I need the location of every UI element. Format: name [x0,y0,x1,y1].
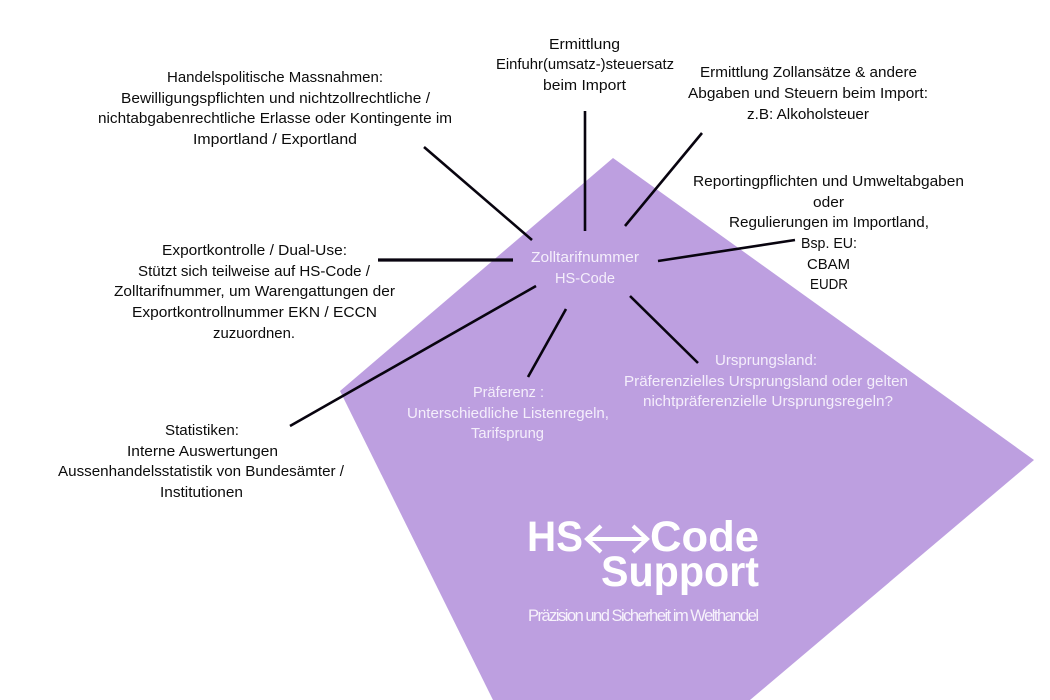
panel: purple background shape [340,158,1034,700]
arrow: line to Ursprungsland [630,296,698,363]
arrow: line to Reportingpflichten [658,240,795,261]
text block: Reportingpflichten und Umweltabgaben: EUDR [810,277,848,293]
text block: Statistiken: Statistiken: [165,423,239,439]
text block: Handelspolitische Massnahmen: Bewilligungspflichten und nichtzollrechtliche / [121,91,431,107]
text block: Reportingpflichten und Umweltabgaben: Reportingpflichten und Umweltabgaben [693,174,964,190]
text block: Präferenz: Tarifsprung [471,426,544,442]
text block: Ursprungsland: Präferenzielles Ursprungsland oder gelten [624,374,908,390]
text block: Statistiken: Aussenhandelsstatistik von Bundesämter / [58,464,345,480]
text block: Präferenz [407,385,609,442]
centre label: Zolltarifnummer HS-Code [531,250,639,287]
text block: Präferenz: Präferenz : [473,385,544,401]
text block: Präferenz: Unterschiedliche Listenregeln, [407,406,609,422]
text block: Handelspolitische Massnahmen [98,70,452,148]
logo: HS Code Support: HS [527,513,583,561]
logo: HS Code Support: Support [601,548,759,596]
text block: Exportkontrolle / Dual-Use: Exportkontrollnummer EKN / ECCN [132,305,377,321]
text block: Handelspolitische Massnahmen: Importland / Exportland [193,132,357,148]
connector lines radiating from centre [290,111,795,426]
text block: Ermittlung Zollansätze: Abgaben und Steuern beim Import: [688,86,928,102]
logo: HS Code Support: Code [650,513,759,561]
text block: Exportkontrolle / Dual-Use: Exportkontrolle / Dual-Use: [162,243,347,259]
text block: Ermittlung Zollansätze: z.B: Alkoholsteuer [747,107,869,123]
text block: Exportkontrolle / Dual-Use: Stützt sich teilweise auf HS-Code / [138,264,371,280]
text block: Exportkontrolle / Dual-Use: zuzuordnen. [213,326,295,342]
text block: Ermittlung Zollansätze [688,65,928,123]
text block: Ermittlung Einfuhrumsatzsteuersatz: Ermittlung [549,37,620,53]
text block: Statistiken: Institutionen [160,485,243,501]
text block: Handelspolitische Massnahmen: nichtabgabenrechtliche Erlasse oder Kontingente im [98,111,452,127]
text block: Ermittlung Einfuhrumsatzsteuersatz: Einfuhr(umsatz-)steuersatz [496,57,674,73]
arrow: line to Präferenz [528,309,566,377]
text block: Reportingpflichten und Umweltabgaben [693,174,964,293]
icon: double-headed arrow [587,526,647,552]
arrow: line to Statistiken [290,286,536,426]
text block: Reportingpflichten und Umweltabgaben: oder [813,195,844,211]
text block: Ermittlung Einfuhrumsatzsteuersatz [496,37,674,94]
arrow: line to Exportkontrolle [378,258,513,262]
text block: Ursprungsland: nichtpräferenzielle Ursprungsregeln? [643,394,893,410]
text block: Ermittlung Zollansätze: Ermittlung Zollansätze & andere [700,65,917,81]
arrow: line to Handelspolitische Massnahmen [424,147,532,240]
text block: Exportkontrolle / Dual-Use [114,243,395,342]
centre label: Zolltarifnummer HS-Code: Zolltarifnummer [531,250,639,266]
logo: HS Code Support [527,513,759,625]
text block: Ursprungsland [624,353,908,410]
text block: Reportingpflichten und Umweltabgaben: Regulierungen im Importland, [729,215,929,231]
text block: Handelspolitische Massnahmen: Handelspolitische Massnahmen: [167,70,383,86]
text block: Ermittlung Einfuhrumsatzsteuersatz: beim Import [543,78,626,94]
text block: Reportingpflichten und Umweltabgaben: Bsp. EU: [801,236,857,252]
text block: Ursprungsland: Ursprungsland: [715,353,817,369]
arrow: line to Einfuhrsteuersatz [584,111,586,231]
logo: HS Code Support: Präzision und Sicherheit im Welthandel [528,607,759,625]
text block: Reportingpflichten und Umweltabgaben: CBAM [807,257,850,273]
centre label: Zolltarifnummer HS-Code: HS-Code [555,271,615,287]
text block: Exportkontrolle / Dual-Use: Zolltarifnummer, um Warengattungen der [114,284,395,300]
arrow: line to Zollansätze [625,133,702,226]
text block: Statistiken [58,423,345,501]
text block: Statistiken: Interne Auswertungen [127,444,278,460]
